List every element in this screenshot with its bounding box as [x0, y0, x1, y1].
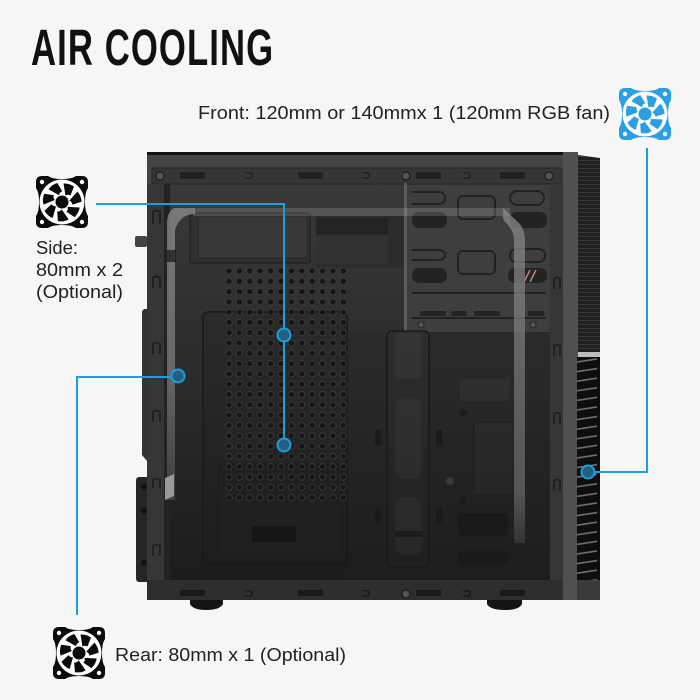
computer case [135, 152, 600, 610]
front panel [577, 155, 600, 600]
top rail with screws [152, 168, 562, 184]
marker: side lower [278, 438, 290, 452]
motherboard panel [203, 312, 347, 564]
icon: blue fan [619, 88, 671, 140]
drive bay [404, 183, 550, 332]
title: AIR COOLING [31, 21, 273, 77]
label: rear: Rear: 80mm x 1 (Optional) [115, 645, 346, 665]
marker: front [582, 466, 594, 478]
callout: front fan [198, 88, 671, 478]
glass side panel reflections [165, 208, 525, 543]
chassis hooks [153, 210, 560, 556]
callout: rear fan [53, 370, 346, 679]
bottom rail [147, 580, 563, 600]
connector line: rear [77, 377, 172, 615]
feet [190, 600, 522, 610]
label: side: 80mm x 2 [36, 260, 123, 280]
connector line: side [96, 204, 284, 445]
case body [147, 152, 565, 600]
right rail [550, 184, 563, 580]
side knob and rear protrusions [135, 236, 147, 582]
motherboard tray recess upper left [190, 213, 310, 263]
left frame strip [147, 184, 167, 580]
ventilation hole grid [224, 266, 348, 502]
label: side: (Optional) [36, 282, 123, 302]
marker: side upper [278, 328, 290, 342]
lower right interior [348, 331, 550, 580]
icon: black fan side [36, 176, 88, 228]
label: side: Side: [36, 238, 78, 258]
label: front: Front: 120mm or 140mmx 1 (120mm RGB fan) [198, 103, 610, 123]
icon: black fan rear [53, 627, 105, 679]
connector line: front [594, 148, 647, 472]
callout: side fans [36, 176, 290, 452]
marker: rear [172, 370, 184, 382]
